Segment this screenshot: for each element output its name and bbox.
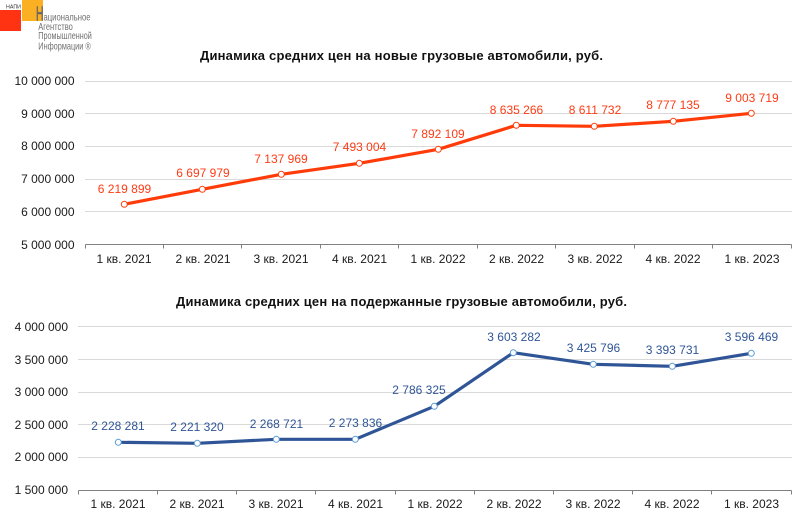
y axis labels: used trucks: 3 000 000 [15,385,68,399]
x axis labels: used trucks: 1 кв. 2023 [724,497,779,511]
data labels: used trucks: 3 603 282 [487,330,541,344]
y axis labels: used trucks [15,320,68,497]
x axis labels: new trucks: 4 кв. 2021 [332,252,387,266]
logo: Агентство [38,21,73,33]
data labels: new trucks: 8 777 135 [646,98,700,112]
logo: Н [36,3,44,25]
data labels: used trucks: 2 273 836 [329,416,383,430]
logo: Промышленной [38,30,92,42]
x axis labels: used trucks: 4 кв. 2022 [644,497,700,511]
y axis labels: new trucks: 5 000 000 [21,238,75,252]
data labels: used trucks [91,330,779,434]
y axis labels: used trucks: 4 000 000 [15,320,68,334]
x axis labels: new trucks: 1 кв. 2023 [724,252,780,266]
line series: new trucks [121,110,754,207]
y axis labels: used trucks: 2 500 000 [15,418,68,432]
x axis labels: new trucks: 1 кв. 2021 [96,252,152,266]
y axis labels: new trucks [14,74,75,252]
data labels: used trucks: 2 228 281 [91,419,145,433]
y axis labels: new trucks: 9 000 000 [21,107,75,121]
y axis labels: new trucks: 10 000 000 [14,74,75,88]
x axis labels: used trucks: 4 кв. 2021 [328,497,383,511]
y axis labels: used trucks: 1 500 000 [15,483,68,497]
x axis labels: used trucks: 3 кв. 2021 [248,497,304,511]
x axis labels: used trucks: 1 кв. 2022 [408,497,463,511]
x axis labels: used trucks: 1 кв. 2021 [90,497,146,511]
data labels: used trucks: 3 393 731 [646,343,700,357]
x axis labels: new trucks: 4 кв. 2022 [646,252,701,266]
data labels: new trucks: 7 137 969 [254,152,308,166]
data labels: new trucks: 6 219 899 [98,182,152,196]
x axis labels: used trucks: 2 кв. 2021 [170,497,225,511]
data labels: new trucks: 7 892 109 [411,127,465,141]
x axis labels: used trucks [90,497,779,511]
title: new trucks: Динамика средних цен на новые грузовые автомобили, руб. [200,48,603,63]
data labels: used trucks: 2 268 721 [250,417,304,431]
x axis labels: new trucks: 1 кв. 2022 [410,252,466,266]
data labels: new trucks [98,91,779,196]
data labels: used trucks: 3 596 469 [725,330,779,344]
chart: used trucks [15,294,792,511]
data labels: new trucks: 8 611 732 [569,103,622,117]
title: used trucks: Динамика средних цен на подержанные грузовые автомобили, руб. [176,294,627,309]
data labels: new trucks: 9 003 719 [725,91,779,105]
y axis labels: new trucks: 6 000 000 [21,205,75,219]
y axis labels: used trucks: 2 000 000 [15,450,68,464]
y axis labels: new trucks: 7 000 000 [21,172,75,186]
data labels: new trucks: 7 493 004 [333,140,387,154]
chart: new trucks [14,48,792,266]
y axis labels: used trucks: 3 500 000 [15,353,68,367]
data labels: used trucks: 2 786 325 [392,383,446,397]
x axis labels: new trucks: 3 кв. 2021 [254,252,309,266]
data labels: new trucks: 6 697 979 [176,166,230,180]
logo: Информации ® [38,40,91,52]
y axis labels: new trucks: 8 000 000 [21,139,75,153]
x axis labels: new trucks [96,252,780,266]
x axis labels: new trucks: 2 кв. 2022 [489,252,544,266]
x axis labels: new trucks: 2 кв. 2021 [176,252,231,266]
data labels: new trucks: 8 635 266 [490,103,544,117]
logo [0,0,92,52]
logo: ациональное [44,11,91,23]
x axis labels: used trucks: 3 кв. 2022 [566,497,621,511]
data labels: used trucks: 3 425 796 [567,341,621,355]
data labels: used trucks: 2 221 320 [170,420,224,434]
logo: НАПИ [6,4,21,10]
x axis labels: used trucks: 2 кв. 2022 [486,497,542,511]
line series: used trucks [115,350,754,446]
x axis labels: new trucks: 3 кв. 2022 [568,252,623,266]
